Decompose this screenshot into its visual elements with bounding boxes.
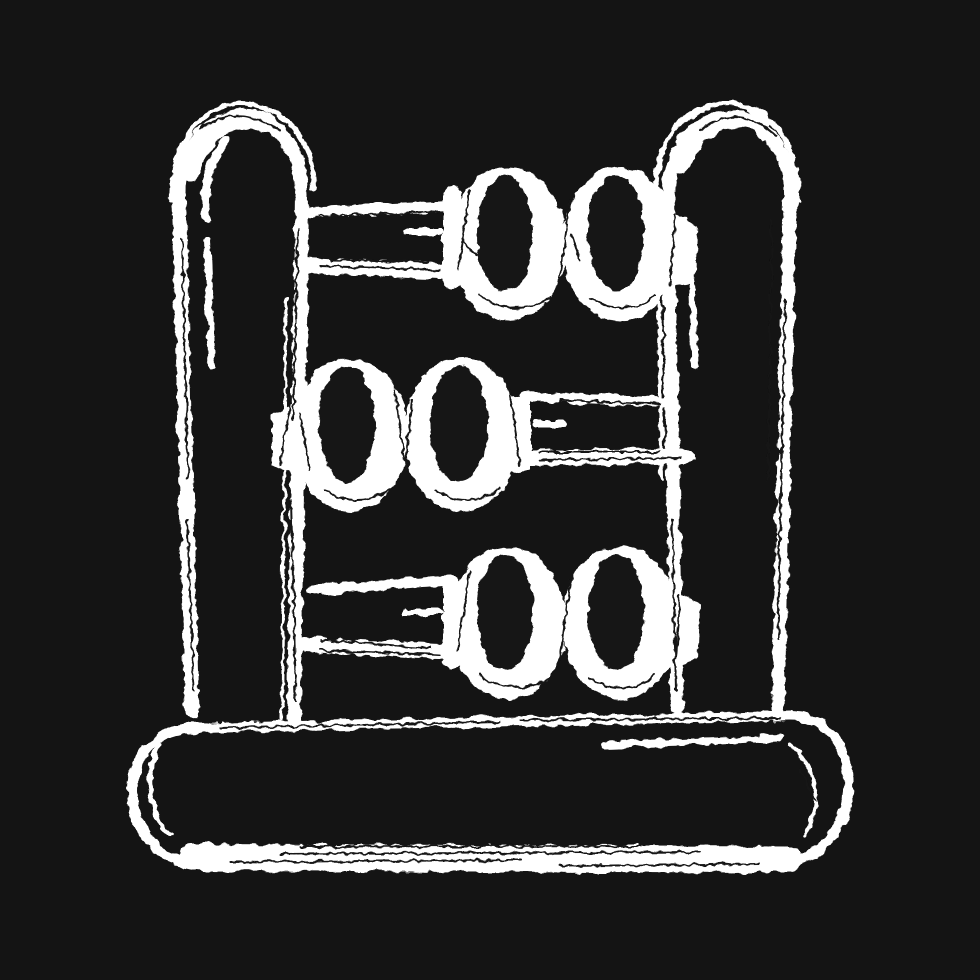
top row rods bbox=[305, 195, 452, 280]
middle row beads bbox=[272, 358, 530, 512]
top row beads bbox=[450, 167, 698, 321]
right post bbox=[656, 104, 798, 708]
bottom row rods bbox=[305, 580, 452, 660]
middle row rods bbox=[525, 396, 688, 458]
abacus base bbox=[132, 716, 848, 868]
chalk scratches bbox=[182, 116, 815, 866]
bead holes bbox=[319, 175, 644, 670]
bottom row beads bbox=[450, 546, 700, 700]
left post bbox=[172, 104, 314, 720]
